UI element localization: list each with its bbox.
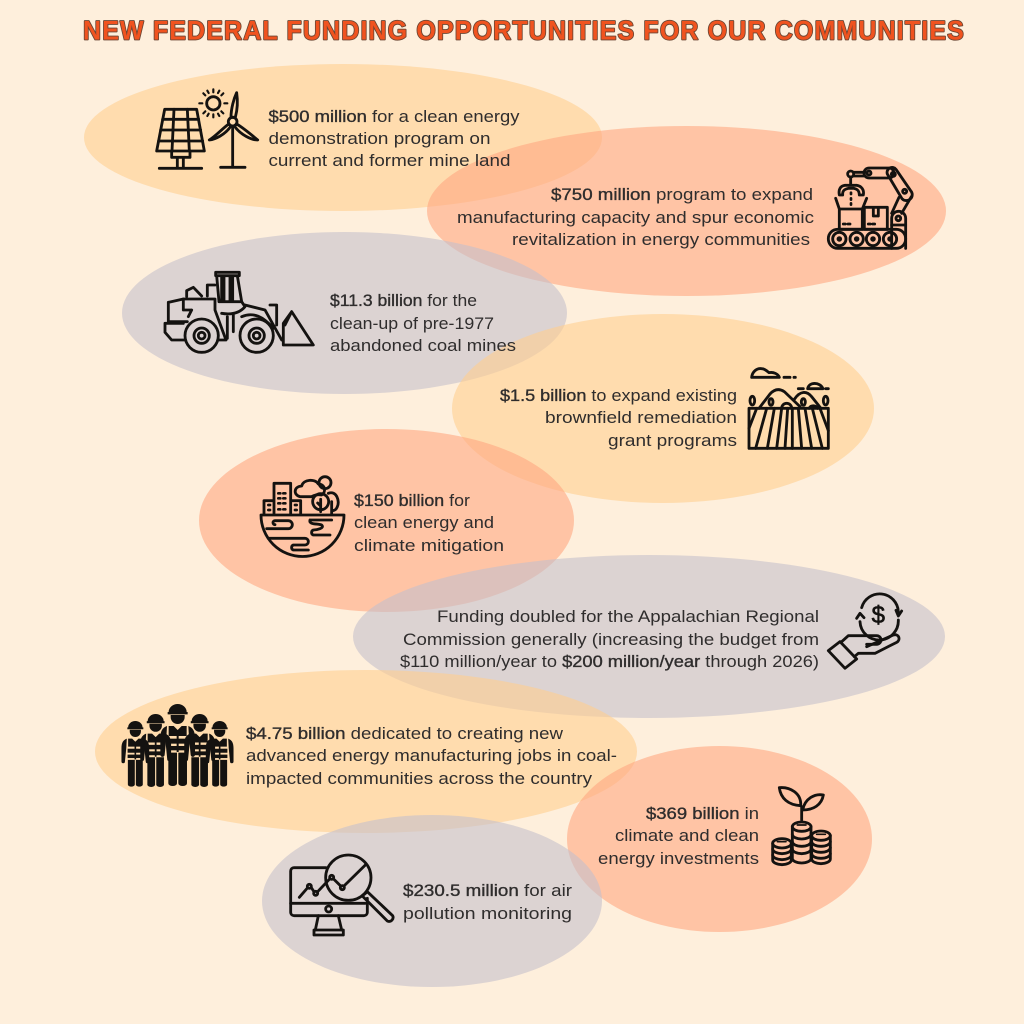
text: $750 million: revitalization in energy communities [512, 231, 810, 249]
text: $11.3 billion: abandoned coal mines [330, 337, 516, 355]
text: $1.5 billion: grant programs [608, 432, 737, 450]
panel: abandoned coal mines ellipse [122, 232, 567, 394]
text: $11.3 billion [330, 292, 516, 355]
panel: climate mitigation ellipse [199, 429, 574, 612]
text: $369 billion: climate and clean [615, 827, 759, 845]
text: $1.5 billion [500, 387, 737, 450]
icon: solar panel, sun and wind turbine [157, 89, 258, 168]
text: Appalachian Regional Commission funding: Funding doubled for the Appalachian Regional [437, 608, 819, 626]
text: $369 billion: energy investments [598, 850, 759, 868]
text: $150 billion: $150 billion for [354, 492, 471, 510]
icon: plant growing from coin stacks [773, 788, 830, 865]
icon: hand with circulating dollar: $ [872, 602, 885, 629]
icon: city and nature globe [261, 477, 344, 556]
text: $150 billion: clean energy and [354, 514, 494, 532]
text: $750 million [457, 186, 814, 249]
text: $369 billion [598, 805, 759, 868]
icon: robotic arm over conveyor belt [828, 167, 912, 248]
text: $11.3 billion: clean-up of pre-1977 [330, 315, 494, 333]
text: $750 million: manufacturing capacity and spur economic [457, 209, 814, 227]
text: $500 million [268, 108, 520, 170]
panel: clean energy demonstration ellipse [84, 64, 602, 211]
text: $500 million: current and former mine land [268, 152, 510, 170]
icon: construction workers [121, 704, 234, 787]
text: $4.75 billion: $4.75 billion dedicated to creating new [246, 725, 563, 743]
text: $11.3 billion: $11.3 billion for the [330, 292, 477, 310]
panel: brownfield remediation ellipse [452, 314, 874, 503]
text: $150 billion: climate mitigation [354, 537, 504, 555]
text: Appalachian Regional Commission funding: Commission generally (increasing the budget from [403, 631, 819, 649]
panel: air pollution monitoring ellipse [262, 815, 602, 987]
panel: climate investments ellipse [567, 746, 872, 932]
text: $4.75 billion: advanced energy manufacturing jobs in coal- [246, 747, 617, 765]
text: $369 billion: $369 billion in [646, 805, 759, 823]
text: $230.5 million: $230.5 million for air [403, 882, 573, 900]
panel: Appalachian Regional Commission ellipse [353, 555, 945, 718]
text: $500 million: $500 million for a clean energy [268, 108, 520, 126]
icon: wheel loader [165, 272, 313, 352]
text: $4.75 billion [246, 725, 617, 788]
text: $150 billion [354, 492, 504, 555]
icon: monitor with magnifying glass [291, 855, 393, 935]
panel: manufacturing capacity ellipse [427, 126, 946, 296]
text: $230.5 million: pollution monitoring [403, 905, 572, 923]
icon: hand with circulating dollar [828, 594, 902, 668]
icon: field and hills [749, 369, 828, 448]
text: $4.75 billion: impacted communities across the country [246, 770, 593, 788]
text: $1.5 billion: $1.5 billion to expand existing [500, 387, 737, 405]
text: $230.5 million [403, 882, 573, 923]
title: NEW FEDERAL FUNDING OPPORTUNITIES FOR OUR COMMUNITIES [83, 16, 965, 46]
text: Appalachian Regional Commission funding [400, 608, 819, 671]
text: $1.5 billion: brownfield remediation [545, 409, 737, 427]
text: $750 million: $750 million program to expand [551, 186, 813, 204]
text: $500 million: demonstration program on [268, 130, 490, 148]
panel: advanced energy jobs ellipse [95, 670, 637, 833]
text: Appalachian Regional Commission funding: $110 million/year to $200 million/year through 2026) [400, 653, 819, 671]
